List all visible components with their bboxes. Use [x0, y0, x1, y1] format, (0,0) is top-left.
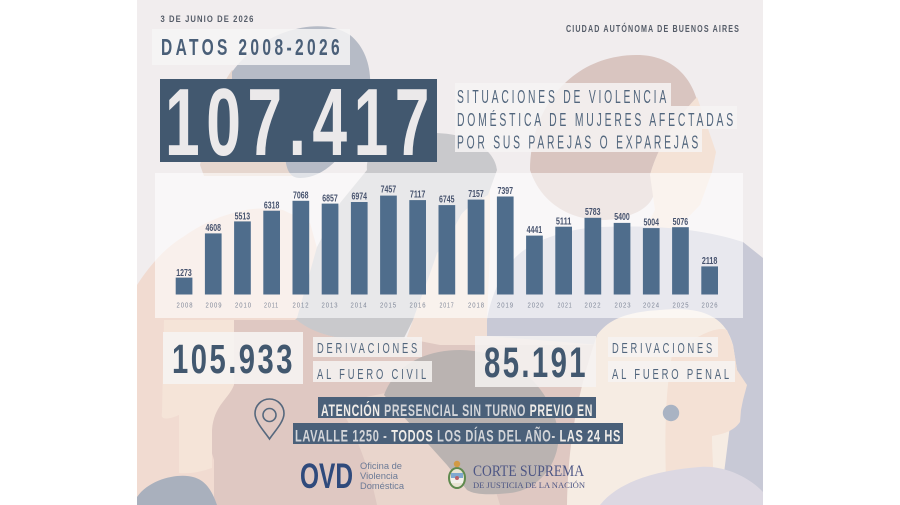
logo: OVD: OVD [300, 457, 353, 496]
icon: coat of arms [449, 461, 465, 488]
logo: OVD: Doméstica [360, 481, 405, 492]
location: CIUDAD AUTÓNOMA DE BUENOS AIRES [566, 22, 740, 35]
bar chart [155, 173, 743, 318]
logo: Corte Suprema: DE JUSTICIA DE LA NACIÓN [473, 480, 585, 490]
bar chart: 4441 [527, 224, 542, 236]
bar chart: 6974 [351, 190, 367, 202]
bar chart: 2026 [702, 300, 718, 310]
bar chart: 2017 [440, 300, 454, 310]
bar chart: 2024 [643, 300, 660, 310]
bar chart: 6857 [322, 192, 338, 204]
bar chart: 2008 [176, 300, 194, 310]
stat: fuero penal: DERIVACIONES [612, 340, 715, 357]
bar chart: 5513 [235, 210, 250, 222]
bar chart: 2015 [380, 300, 397, 310]
stat: fuero penal: AL FUERO PENAL [612, 366, 732, 383]
icon: earring [663, 405, 679, 421]
opening hours notice: ATENCIÓN PRESENCIAL SIN TURNO PREVIO EN [321, 401, 593, 420]
stat: fuero civil: DERIVACIONES [317, 340, 420, 357]
description: SITUACIONES DE VIOLENCIA [457, 86, 669, 107]
bar chart: 1273 [176, 267, 192, 279]
bar chart: 5783 [585, 206, 601, 218]
bar chart: 4608 [205, 222, 221, 234]
bar chart: 2014 [350, 300, 368, 310]
stat: fuero penal [475, 336, 735, 387]
heading: datos: DATOS 2008-2026 [161, 34, 343, 60]
bar chart: 2012 [292, 300, 310, 310]
bar chart: 2011 [264, 300, 279, 310]
bar chart: 2022 [584, 300, 602, 310]
bar chart: 5111 [556, 216, 571, 228]
bar chart: 2023 [614, 300, 632, 310]
bar chart: 2025 [672, 300, 690, 310]
bar chart: 2016 [410, 300, 426, 310]
poster background [137, 0, 763, 505]
stat: fuero civil: AL FUERO CIVIL [317, 366, 429, 383]
stat: fuero penal: 85.191 [484, 339, 588, 387]
bar chart: 2013 [322, 300, 338, 310]
bar chart: 2010 [235, 300, 252, 310]
logo: Corte Suprema: CORTE SUPREMA [473, 463, 585, 480]
bar chart: 2020 [528, 300, 544, 310]
bar chart: 7068 [293, 190, 309, 202]
bar chart: 7117 [410, 188, 425, 200]
bar chart: 6745 [439, 194, 455, 206]
total number panel: 107.417 [165, 69, 436, 176]
stat: fuero civil: 105.933 [172, 336, 295, 382]
stat: fuero civil [163, 332, 432, 384]
bar chart: 2009 [206, 300, 222, 310]
bar chart: 5400 [614, 211, 630, 223]
date: 3 DE JUNIO DE 2026 [160, 14, 254, 24]
heading: datos [152, 29, 350, 65]
bar chart: 7457 [381, 184, 396, 196]
bar chart: 7157 [468, 188, 484, 200]
bar chart: 2118 [702, 255, 717, 267]
bar chart: 2021 [558, 300, 572, 310]
bar chart: 6318 [264, 200, 279, 212]
logo: Corte Suprema [449, 461, 585, 490]
logo: OVD: Violencia [360, 471, 399, 482]
opening hours notice [293, 397, 623, 446]
description [455, 83, 737, 152]
bar chart: 7397 [497, 185, 513, 197]
bar chart: 2019 [497, 300, 514, 310]
description: POR SUS PAREJAS O EXPAREJAS [457, 132, 701, 152]
total number panel [160, 69, 437, 176]
bar chart: 5076 [673, 216, 688, 228]
bar chart: 2018 [468, 300, 485, 310]
bar chart: 5004 [643, 216, 659, 228]
icon: location pin [255, 399, 284, 439]
opening hours notice: LAVALLE 1250 - TODOS LOS DÍAS DEL AÑO- LAS 24 HS [295, 426, 621, 446]
logo: OVD: Oficina de [360, 461, 402, 472]
